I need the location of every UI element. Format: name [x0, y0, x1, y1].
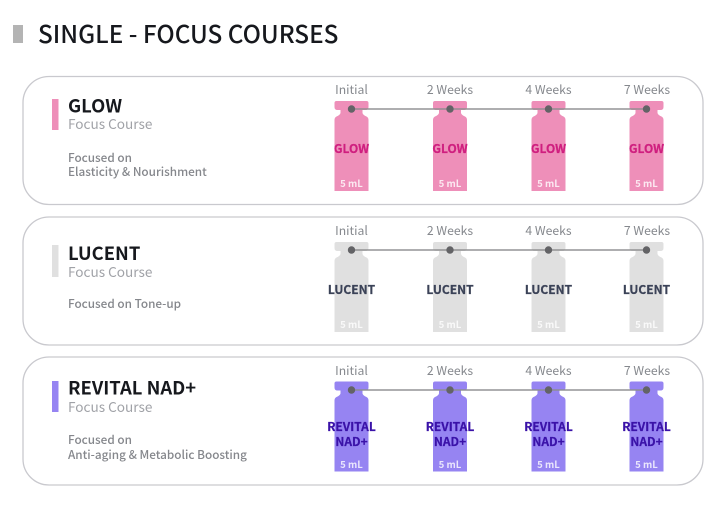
- REVITAL vial labels: REVITAL: [524, 418, 573, 435]
- REVITAL week labels: 7 Weeks: [624, 361, 670, 379]
- REVITAL volume labels: 5 mL: [537, 457, 560, 471]
- LUCENT volume labels: [340, 317, 658, 331]
- GLOW vial labels: [334, 140, 664, 157]
- REVITAL vials: [334, 382, 664, 472]
- REVITAL volume labels: [340, 457, 658, 471]
- GLOW vial labels: GLOW: [334, 140, 369, 157]
- panel: LUCENT: [23, 217, 703, 345]
- REVITAL volume labels: 5 mL: [635, 457, 658, 471]
- LUCENT vial labels: [328, 281, 671, 298]
- LUCENT week labels: [335, 221, 670, 239]
- LUCENT timeline: [348, 246, 650, 254]
- panel: REVITAL NAD+: [23, 357, 703, 485]
- LUCENT description: Focused on Tone-up: [68, 295, 181, 312]
- LUCENT vials: [334, 242, 664, 332]
- LUCENT vial labels: LUCENT: [525, 281, 573, 298]
- REVITAL timeline: [348, 386, 650, 394]
- GLOW vial labels: GLOW: [432, 140, 468, 157]
- GLOW description: Elasticity & Nourishment: [68, 163, 207, 180]
- REVITAL vial labels: REVITAL: [327, 418, 376, 435]
- REVITAL vial labels: NAD+: [335, 433, 368, 450]
- GLOW week labels: [335, 80, 670, 98]
- LUCENT vial labels: LUCENT: [328, 281, 376, 298]
- LUCENT volume labels: 5 mL: [340, 317, 363, 331]
- REVITAL vial labels: [327, 418, 671, 450]
- GLOW subtitle: Focus Course: [68, 113, 152, 133]
- GLOW week labels: Initial: [335, 80, 368, 98]
- LUCENT volume labels: 5 mL: [635, 317, 658, 331]
- LUCENT volume labels: 5 mL: [439, 317, 462, 331]
- GLOW volume labels: 5 mL: [340, 176, 363, 190]
- REVITAL color bar: [52, 381, 58, 412]
- LUCENT week labels: 2 Weeks: [427, 221, 473, 239]
- LUCENT vial labels: LUCENT: [426, 281, 474, 298]
- REVITAL vial labels: NAD+: [630, 433, 663, 450]
- LUCENT week labels: 7 Weeks: [624, 221, 670, 239]
- REVITAL week labels: 2 Weeks: [427, 361, 473, 379]
- GLOW timeline: [348, 105, 650, 113]
- GLOW volume labels: 5 mL: [537, 176, 560, 190]
- GLOW heading: GLOW: [68, 92, 122, 118]
- GLOW color bar: [52, 99, 58, 130]
- LUCENT subtitle: Focus Course: [68, 261, 152, 281]
- title: SINGLE - FOCUS COURSES: [38, 15, 338, 50]
- REVITAL week labels: [335, 361, 670, 379]
- panel: GLOW: [23, 76, 703, 204]
- LUCENT volume labels: 5 mL: [537, 317, 560, 331]
- REVITAL vial labels: REVITAL: [622, 418, 671, 435]
- GLOW vials: [334, 101, 664, 191]
- LUCENT vial labels: LUCENT: [623, 281, 671, 298]
- REVITAL week labels: Initial: [335, 361, 368, 379]
- GLOW volume labels: [340, 176, 658, 190]
- LUCENT week labels: Initial: [335, 221, 368, 239]
- LUCENT heading: LUCENT: [68, 240, 140, 266]
- GLOW week labels: 2 Weeks: [427, 80, 473, 98]
- LUCENT week labels: 4 Weeks: [525, 221, 572, 239]
- LUCENT color bar: [52, 245, 58, 277]
- REVITAL volume labels: 5 mL: [439, 457, 462, 471]
- REVITAL vial labels: REVITAL: [426, 418, 474, 435]
- GLOW week labels: 4 Weeks: [525, 80, 572, 98]
- GLOW vial labels: GLOW: [531, 140, 566, 157]
- REVITAL vial labels: NAD+: [532, 433, 565, 450]
- GLOW volume labels: 5 mL: [635, 176, 658, 190]
- REVITAL volume labels: 5 mL: [340, 457, 363, 471]
- GLOW vial labels: GLOW: [629, 140, 664, 157]
- GLOW volume labels: 5 mL: [439, 176, 462, 190]
- REVITAL vial labels: NAD+: [434, 433, 466, 450]
- REVITAL week labels: 4 Weeks: [525, 361, 572, 379]
- GLOW week labels: 7 Weeks: [624, 80, 670, 98]
- REVITAL subtitle: Focus Course: [68, 396, 152, 416]
- REVITAL description: Focused on: [68, 431, 132, 448]
- REVITAL heading: REVITAL NAD+: [68, 374, 196, 400]
- GLOW description: Focused on: [68, 149, 132, 166]
- REVITAL description: Anti-aging & Metabolic Boosting: [68, 446, 247, 463]
- section marker: [13, 25, 23, 43]
